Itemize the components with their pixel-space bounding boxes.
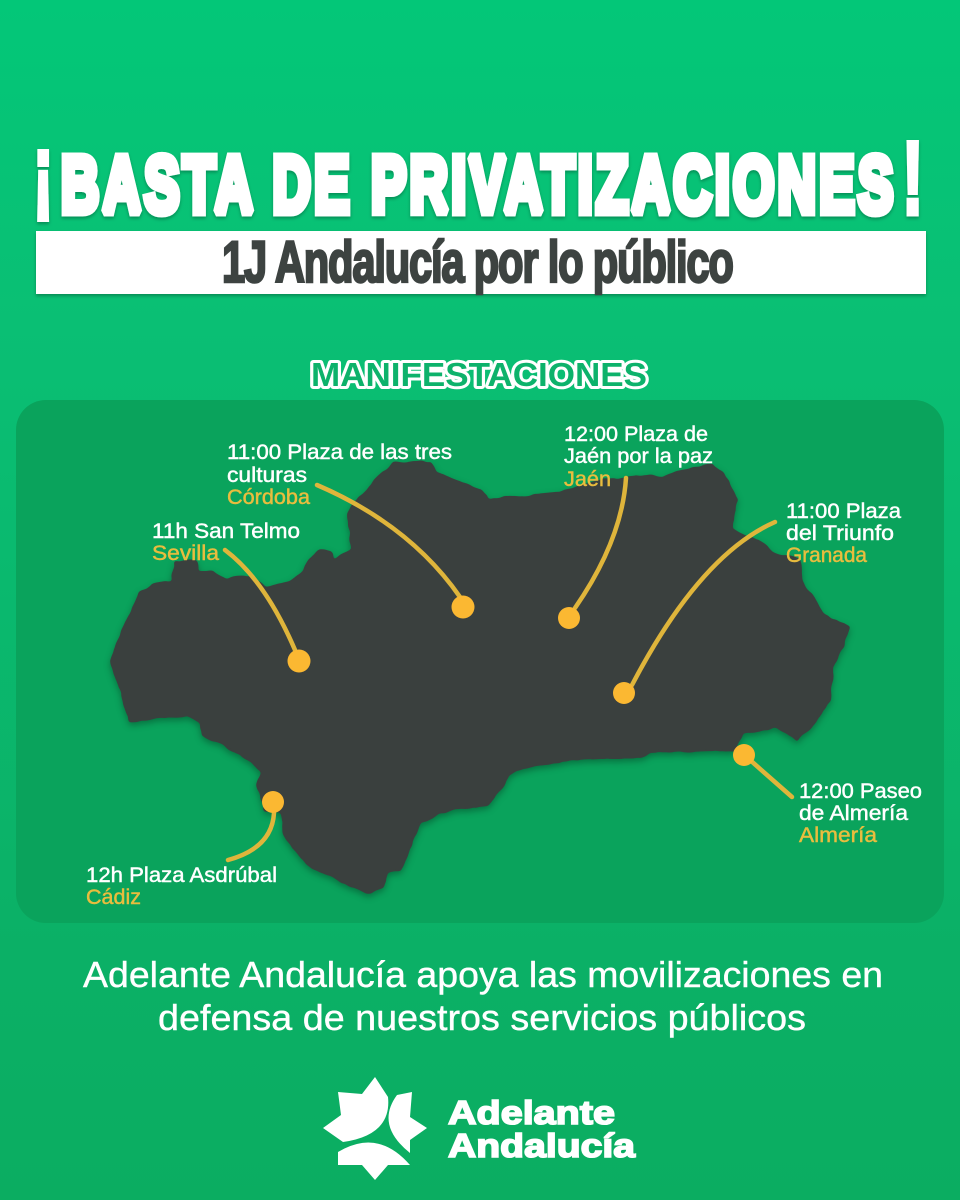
title: ! xyxy=(902,121,923,237)
map: Andalucía xyxy=(110,463,850,892)
icon: star emblem xyxy=(323,1077,427,1180)
closing statement: defensa de nuestros servicios públicos xyxy=(158,997,806,1038)
title xyxy=(33,116,923,237)
logo wordmark xyxy=(448,1094,636,1164)
title: ¡ xyxy=(33,116,53,226)
closing statement: Adelante Andalucía apoya las movilizaciones en xyxy=(83,954,883,995)
marker: Almería: de Almería xyxy=(799,802,908,825)
logo: Adelante Andalucía xyxy=(323,1077,636,1180)
marker: Jaén xyxy=(558,423,713,629)
marker: Sevilla xyxy=(152,520,310,672)
marker: Jaén: Jaén xyxy=(564,468,611,491)
logo wordmark: Andalucía xyxy=(448,1127,636,1164)
subtitle banner: 1J Andalucía por lo público xyxy=(222,229,734,295)
marker: Jaén: Jaén por la paz xyxy=(564,445,713,468)
marker: Cádiz: Cádiz xyxy=(86,886,141,909)
subtitle banner xyxy=(36,229,926,295)
marker: Cádiz xyxy=(86,791,284,909)
marker: Granada: Granada xyxy=(786,544,867,567)
marker: Granada: 11:00 Plaza xyxy=(786,500,901,523)
marker: Córdoba: Córdoba xyxy=(227,486,310,509)
marker: Sevilla: Sevilla xyxy=(152,542,219,565)
panel: map of demonstrations xyxy=(16,400,944,923)
marker: Almería xyxy=(733,744,922,847)
closing statement xyxy=(83,954,883,1038)
marker: Almería: Almería xyxy=(799,824,877,847)
logo wordmark: Adelante xyxy=(448,1094,615,1131)
marker: Córdoba xyxy=(227,441,474,618)
marker: Sevilla: 11h San Telmo xyxy=(152,520,300,543)
marker: Cádiz: 12h Plaza Asdrúbal xyxy=(86,864,277,887)
marker: Jaén: 12:00 Plaza de xyxy=(564,423,708,446)
marker: Granada: del Triunfo xyxy=(786,522,894,545)
marker: Córdoba: culturas xyxy=(227,464,307,487)
marker: Almería: 12:00 Paseo xyxy=(799,780,922,803)
marker: Granada xyxy=(613,500,901,704)
heading: manifestaciones: MANIFESTACIONES xyxy=(311,356,647,393)
marker: Córdoba: 11:00 Plaza de las tres xyxy=(227,441,452,464)
title: BASTA DE PRIVATIZACIONES xyxy=(61,141,893,230)
